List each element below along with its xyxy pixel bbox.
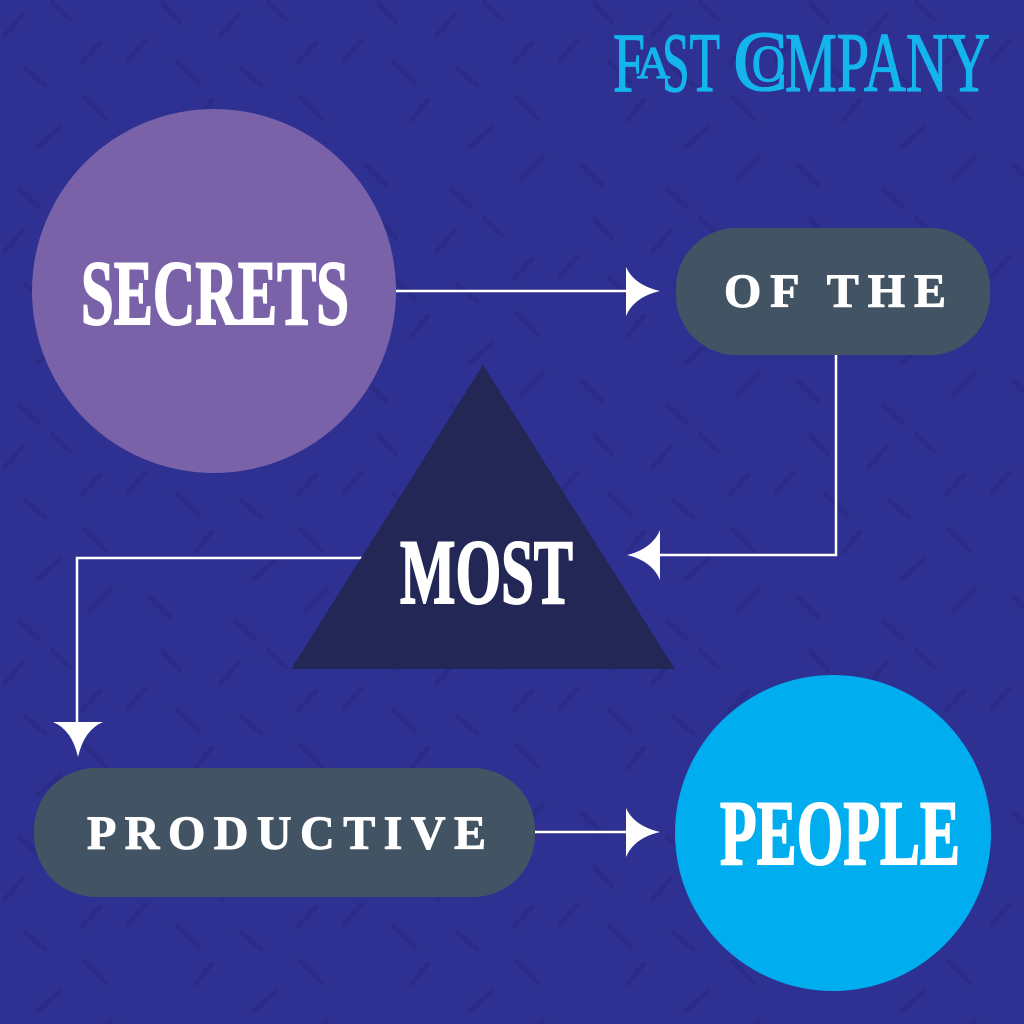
pill: of the — [676, 228, 990, 355]
pill: productive — [34, 768, 535, 897]
arrow: of the to most — [627, 355, 836, 580]
logo: Fast Company: O — [752, 36, 785, 93]
heading: of the: OF THE — [724, 265, 946, 318]
logo: Fast Company: F — [613, 16, 645, 110]
arrow: most to productive — [53, 558, 362, 757]
arrow: secrets to of the — [396, 267, 660, 316]
logo: Fast Company: A — [637, 37, 670, 88]
triangle: most — [291, 365, 675, 669]
heading: secrets: SECRETS — [81, 242, 349, 344]
logo: Fast Company — [613, 13, 990, 110]
logo: Fast Company: ST — [662, 16, 720, 110]
logo: Fast Company: C — [733, 13, 788, 109]
heading: most: MOST — [400, 521, 573, 623]
heading: productive: PRODUCTIVE — [87, 807, 486, 860]
arrow: productive to people — [535, 808, 660, 857]
circle: people — [675, 675, 991, 991]
circle: secrets — [32, 109, 396, 473]
